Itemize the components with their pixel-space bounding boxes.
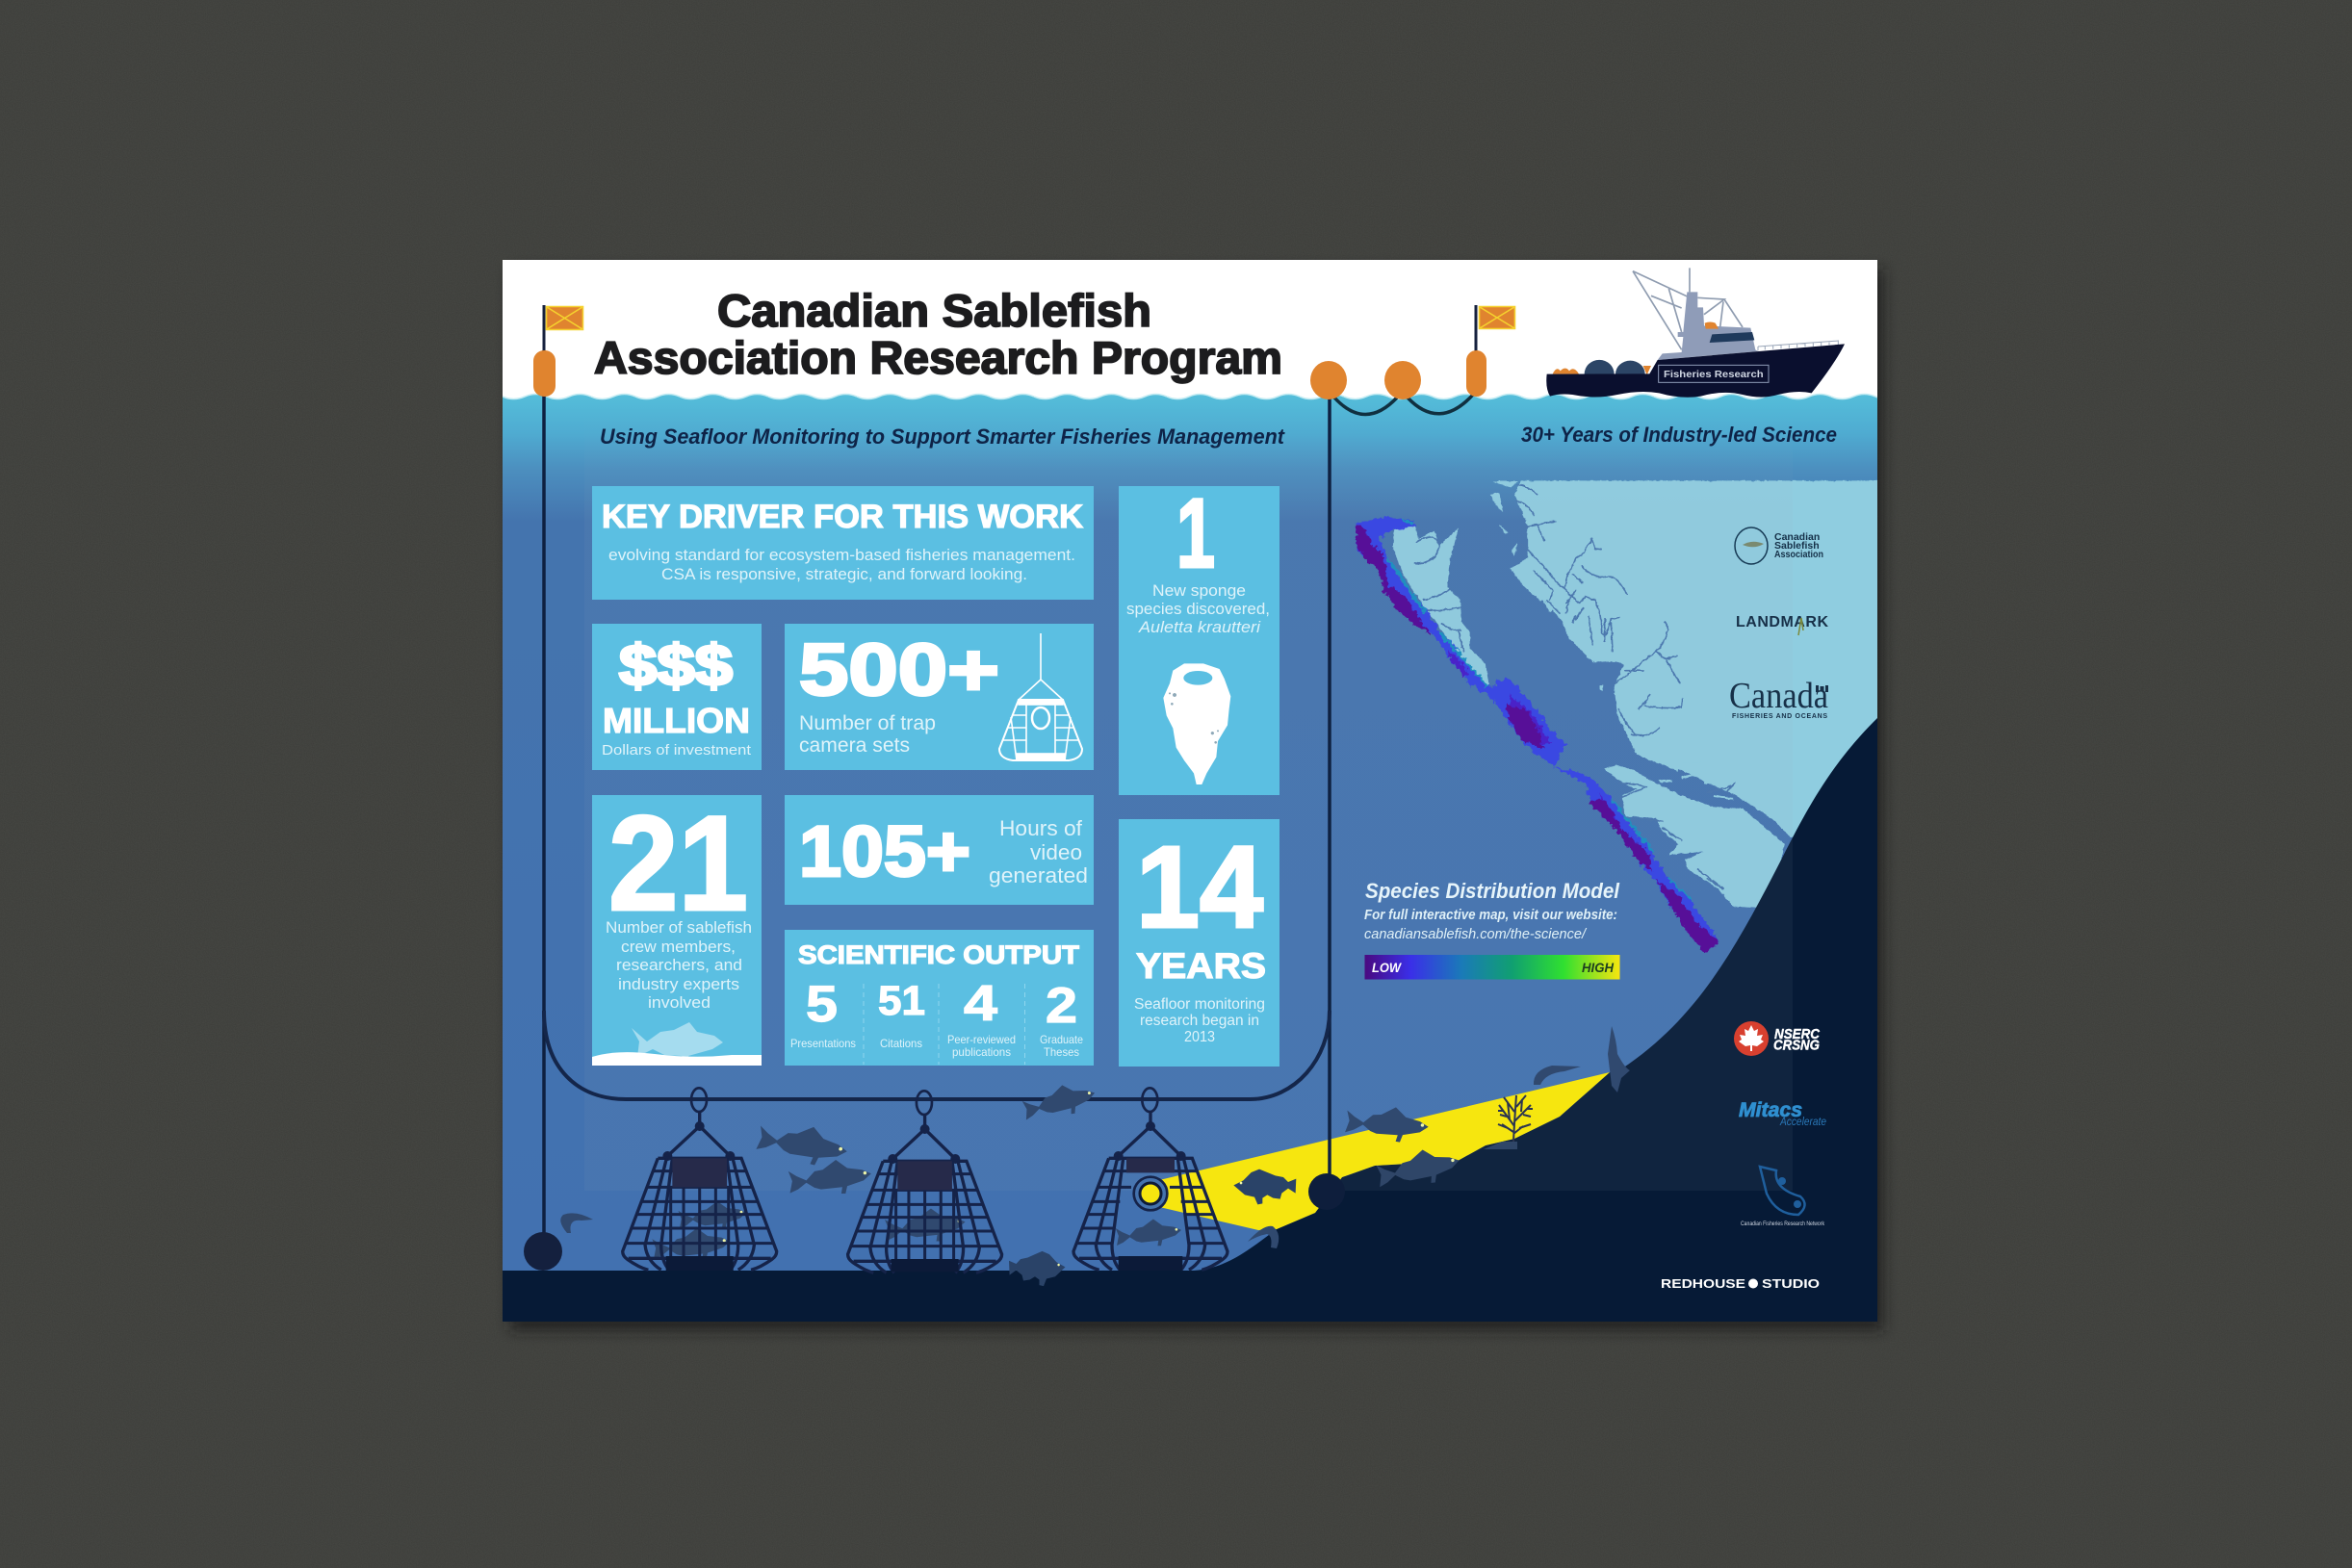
water — [503, 390, 1877, 1285]
logo: nserc: CRSNG — [1773, 1038, 1820, 1053]
card shadow — [510, 270, 1883, 1330]
buoy left with flag — [533, 305, 583, 397]
map legend block — [1364, 879, 1620, 980]
panel: scientific output: Citations — [880, 1037, 922, 1050]
icon: sablefish — [632, 1022, 723, 1060]
panel: scientific output: Theses — [1044, 1045, 1079, 1059]
upright fish on slope — [1608, 1026, 1630, 1092]
rockfish — [1009, 1170, 1296, 1286]
blue band — [1356, 517, 1720, 953]
panel: key driver: KEY DRIVER FOR THIS WORK — [602, 499, 1083, 535]
buoy balls and connecting ropes — [1310, 361, 1473, 414]
teal edge — [1388, 520, 1692, 900]
logo: canadian sablefish association: Canadian — [1774, 531, 1820, 543]
panel: scientific output: 2 — [1046, 978, 1077, 1034]
prawn on beam — [1534, 1066, 1581, 1085]
map: land of coastal British Columbia — [1393, 480, 1894, 908]
panel: new sponge species: Auletta krautteri — [1138, 618, 1261, 636]
icon: sponge — [1163, 663, 1230, 784]
panel: scientific output — [785, 930, 1094, 1066]
panel: fourteen years: research began in — [1140, 1013, 1259, 1029]
wave edge — [503, 390, 1877, 400]
map legend block: HIGH — [1582, 960, 1615, 975]
panel: crew members: Number of sablefish — [606, 918, 752, 937]
logo: mitacs — [1739, 1099, 1826, 1128]
subtitle: Using Seafloor Monitoring to Support Smarter Fisheries Management — [600, 424, 1286, 449]
camera light beam — [1155, 1072, 1610, 1230]
panel: scientific output: 51 — [878, 978, 925, 1024]
panel: hours of video: Hours of — [999, 816, 1083, 840]
panel: fourteen years: YEARS — [1136, 946, 1266, 986]
fish swimming around traps — [652, 1081, 1460, 1260]
panel: key driver — [592, 486, 1094, 600]
panel: trap camera sets: camera sets — [799, 734, 910, 757]
panel: scientific output: 4 — [964, 976, 997, 1032]
rigging — [1633, 268, 1743, 349]
infographic card — [503, 260, 1894, 1322]
railing — [1758, 341, 1839, 350]
panel: hours of video: video — [1030, 840, 1082, 864]
ship name plate: Fisheries Research — [1664, 370, 1764, 380]
panel: scientific output: Peer-reviewed — [947, 1033, 1016, 1046]
credit: redhouse studio — [1661, 1276, 1820, 1291]
logo: mitacs: Mitacs — [1739, 1099, 1802, 1121]
hull — [1546, 344, 1845, 398]
icon: trap camera — [999, 633, 1082, 760]
colour ramp — [1365, 955, 1619, 980]
vertical line right — [1328, 397, 1331, 1179]
panel: fourteen years: 14 — [1136, 821, 1263, 952]
panel: crew members — [592, 787, 762, 1066]
seafloor slope — [503, 718, 1877, 1322]
panel: hours of video: 105+ — [799, 811, 970, 891]
panel: trap camera sets: 500+ — [799, 630, 999, 711]
superstructure — [1658, 292, 1758, 360]
haida gwaii — [1393, 527, 1489, 686]
inlets — [1415, 484, 1735, 888]
map legend block: Species Distribution Model — [1365, 879, 1620, 903]
logo: landmark: LANDMARK — [1736, 614, 1828, 630]
panel: crew members: researchers, and — [616, 956, 742, 974]
panel: fourteen years — [1119, 819, 1279, 1067]
violet mid layer — [1449, 652, 1617, 818]
map legend block: For full interactive map, visit our website: — [1364, 908, 1617, 923]
panel: key driver: CSA is responsive, strategic, and forward looking. — [661, 565, 1027, 583]
sky panel — [503, 260, 1877, 385]
title — [594, 285, 1282, 383]
panel: new sponge species — [1119, 478, 1279, 795]
orange floats on deck — [1553, 321, 1719, 374]
panel: new sponge species: 1 — [1176, 478, 1215, 588]
panel: scientific output: publications — [952, 1045, 1011, 1059]
trap 1 — [623, 1088, 777, 1271]
window — [1710, 332, 1754, 343]
panel: new sponge species: species discovered, — [1126, 600, 1270, 618]
panel: investment — [592, 624, 762, 770]
coral — [1498, 1095, 1533, 1142]
seabed strip — [592, 1052, 762, 1066]
logo: canadian sablefish association: Sablefish — [1774, 540, 1820, 552]
panel: hours of video: generated — [989, 863, 1088, 887]
panel: scientific output: Presentations — [790, 1037, 856, 1050]
panel: investment: MILLION — [603, 701, 750, 740]
ground rope — [544, 1011, 1330, 1099]
right anchor — [1308, 1173, 1345, 1210]
shrimp left — [560, 1213, 593, 1233]
panel: new sponge species: New sponge — [1152, 581, 1246, 600]
camera lens — [1134, 1177, 1167, 1210]
panel: crew members: 21 — [608, 787, 748, 938]
logo: canadian fisheries research network — [1741, 1167, 1825, 1227]
ship name plate — [1659, 365, 1769, 382]
map legend block: canadiansablefish.com/the-science/ — [1364, 927, 1588, 942]
logo: nserc — [1734, 1021, 1820, 1056]
title: Canadian Sablefish — [717, 285, 1151, 336]
vertical line left — [542, 350, 546, 1237]
panel: investment: $$$ — [619, 633, 733, 698]
panel: trap camera sets — [785, 624, 1094, 770]
panel: fourteen years: 2013 — [1184, 1029, 1215, 1045]
research ship — [1546, 268, 1845, 398]
panel: crew members: involved — [648, 993, 711, 1012]
logo: canada: Canada — [1729, 676, 1828, 716]
panel: crew members: crew members, — [621, 938, 736, 956]
panel: investment: Dollars of investment — [602, 742, 752, 758]
left anchor — [524, 1232, 562, 1271]
trap 3 with camera — [1073, 1088, 1228, 1271]
vancouver island — [1605, 765, 1784, 908]
logo: canadian sablefish association: Association — [1774, 549, 1823, 560]
net drums — [1585, 360, 1645, 374]
logo: mitacs: Accelerate — [1779, 1115, 1826, 1128]
logo: canada: FISHERIES AND OCEANS — [1732, 713, 1827, 720]
credit: redhouse studio: STUDIO — [1762, 1276, 1820, 1291]
panel: scientific output: 5 — [806, 976, 838, 1033]
logo: canadian fisheries research network: Canadian Fisheries Research Network — [1741, 1221, 1825, 1227]
panel: scientific output: Graduate — [1040, 1033, 1083, 1046]
panel: scientific output: SCIENTIFIC OUTPUT — [798, 940, 1080, 969]
panel: key driver: evolving standard for ecosystem-based fisheries management. — [608, 546, 1075, 564]
purple core — [1356, 525, 1720, 953]
map legend block: LOW — [1372, 960, 1403, 975]
credit: redhouse studio: REDHOUSE — [1661, 1276, 1745, 1291]
faint overlay panel — [1340, 837, 1793, 1191]
title: Association Research Program — [594, 332, 1282, 383]
coral rock — [1484, 1142, 1517, 1149]
logo: canadian sablefish association — [1735, 527, 1823, 564]
panel: trap camera sets: Number of trap — [799, 712, 936, 734]
tagline: 30+ Years of Industry-led Science — [1521, 423, 1837, 447]
logo: nserc: NSERC — [1774, 1027, 1820, 1042]
trap 2 — [848, 1091, 1002, 1272]
panel: hours of video — [785, 795, 1094, 905]
species distribution band on map — [1356, 517, 1720, 953]
coastal islands — [1490, 481, 1603, 690]
buoy right with flag — [1466, 305, 1515, 397]
panel: crew members: industry experts — [618, 975, 739, 993]
shrimp on seafloor — [1248, 1226, 1279, 1248]
panel: fourteen years: Seafloor monitoring — [1134, 996, 1265, 1013]
mainland — [1512, 480, 1894, 837]
strait islands — [1659, 762, 1733, 799]
